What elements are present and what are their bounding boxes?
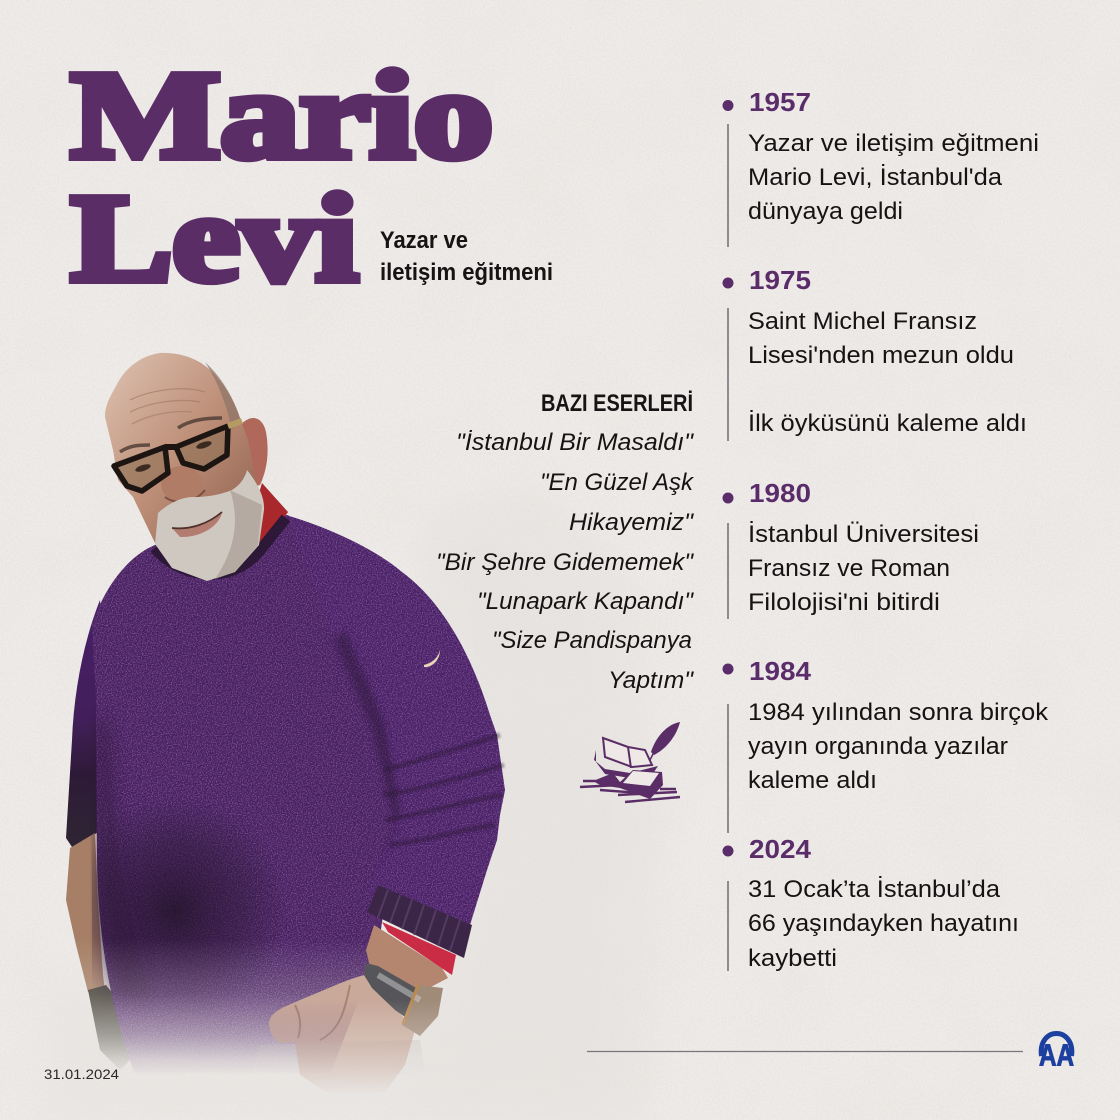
entry 1980 — [722, 478, 979, 619]
right arm — [286, 515, 505, 925]
mouth — [172, 512, 222, 537]
entry 1975: İlk öyküsünü kaleme aldı — [748, 410, 1027, 437]
beard — [155, 470, 264, 581]
entry 1975: 1975 — [749, 265, 811, 295]
left hand — [66, 833, 106, 1000]
portrait illustration — [66, 353, 505, 1110]
entry 1984: yayın organında yazılar — [748, 733, 1008, 760]
entry 2024: 2024 — [749, 834, 812, 864]
entry 1957: 1957 — [749, 87, 811, 117]
works: BAZI ESERLERİ: "En Güzel Aşk — [540, 469, 695, 496]
sweater neckline — [155, 518, 286, 574]
works: BAZI ESERLERİ: "Lunapark Kapandı" — [477, 588, 694, 615]
subtitle: iletişim eğitmeni — [380, 259, 553, 286]
timeline — [722, 87, 1049, 972]
entry 1957: Mario Levi, İstanbul'da — [748, 164, 1002, 191]
entry 1980: İstanbul Üniversitesi — [748, 521, 979, 548]
date: 31.01.2024 — [44, 1067, 120, 1082]
works: BAZI ESERLERİ — [436, 390, 695, 694]
logo: AA: AA — [1039, 1038, 1074, 1072]
right cuff — [367, 885, 472, 958]
icon: books and quill — [580, 722, 680, 802]
title: Mario Levi: Mario — [71, 47, 493, 185]
entry 2024: 31 Ocak’ta İstanbul’da — [748, 876, 1000, 903]
entry 1957 — [722, 87, 1039, 247]
red shirt cuff — [382, 922, 456, 975]
entry 1957: Yazar ve iletişim eğitmeni — [748, 130, 1039, 157]
entry 1975: Saint Michel Fransız — [748, 308, 977, 335]
head — [105, 353, 268, 581]
entry 1980: 1980 — [749, 478, 811, 508]
works: BAZI ESERLERİ: "İstanbul Bir Masaldı" — [456, 429, 694, 456]
works: BAZI ESERLERİ: BAZI ESERLERİ — [541, 390, 693, 417]
right forearm — [366, 925, 448, 988]
entry 1975: Lisesi'nden mezun oldu — [748, 342, 1014, 369]
entry 1980: Filolojisi'ni bitirdi — [748, 589, 940, 616]
torso — [92, 515, 402, 1080]
subtitle — [380, 227, 553, 286]
left sleeve — [66, 600, 100, 847]
works: BAZI ESERLERİ: "Bir Şehre Gidememek" — [436, 549, 694, 576]
entry 2024: 66 yaşındayken hayatını — [748, 910, 1019, 937]
entry 1957: dünyaya geldi — [748, 198, 903, 225]
title: Mario Levi — [71, 47, 493, 308]
nose — [161, 466, 203, 502]
entry 1984: 1984 yılından sonra birçok — [748, 699, 1049, 726]
entry 2024 — [722, 834, 1019, 972]
works: BAZI ESERLERİ: "Size Pandispanya — [492, 627, 692, 654]
entry 1984: kaleme aldı — [748, 767, 877, 794]
trousers — [88, 985, 130, 1070]
right hand — [269, 975, 415, 1095]
entry 1975 — [722, 265, 1027, 441]
footer rule — [587, 1050, 1023, 1052]
subtitle: Yazar ve — [380, 227, 468, 254]
works: BAZI ESERLERİ: Yaptım" — [608, 667, 694, 694]
entry 1984: 1984 — [749, 656, 812, 686]
title: Mario Levi: Levi — [71, 170, 358, 308]
red collar — [245, 483, 288, 550]
eyebrows — [120, 418, 222, 452]
trousers front — [294, 1040, 422, 1052]
entry 2024: kaybetti — [748, 945, 837, 972]
wristwatch — [364, 963, 443, 1036]
glasses — [114, 421, 242, 491]
works: BAZI ESERLERİ: Hikayemiz" — [569, 509, 694, 536]
entry 1980: Fransız ve Roman — [748, 555, 950, 582]
entry 1984 — [722, 656, 1049, 833]
